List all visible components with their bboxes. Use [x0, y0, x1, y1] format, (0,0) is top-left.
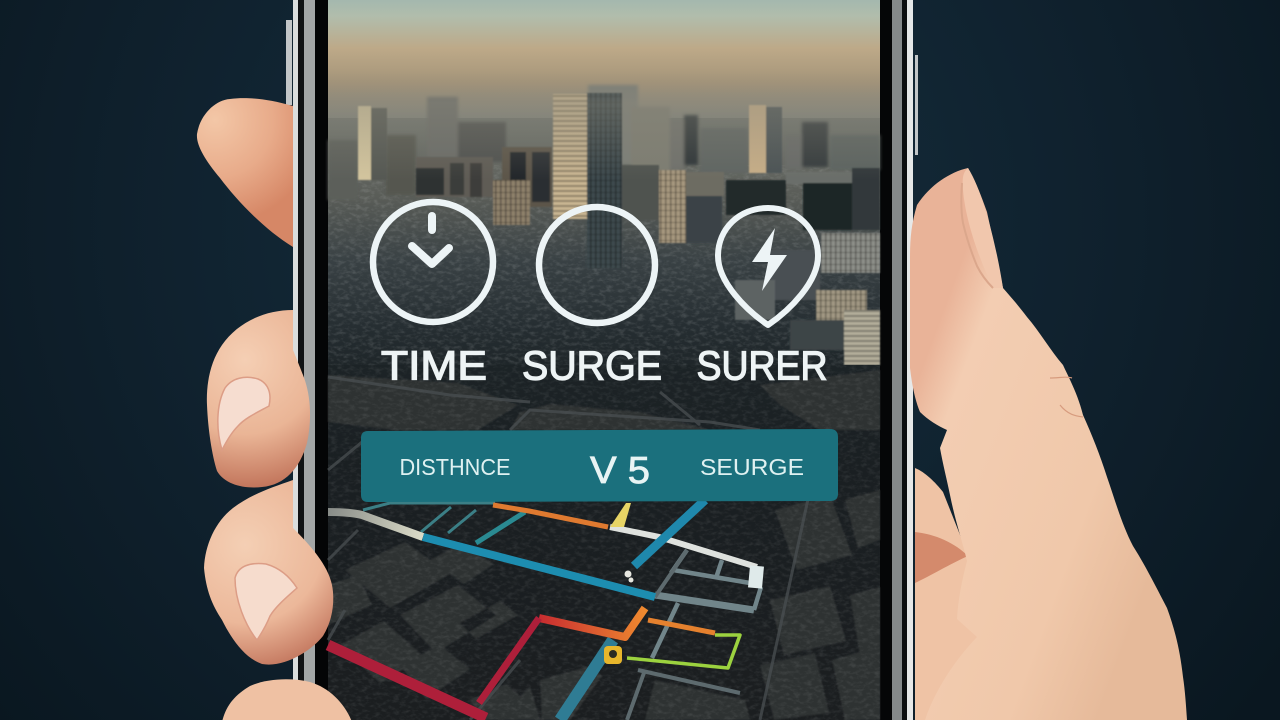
back finger and palm [915, 468, 1000, 720]
thumb [910, 168, 1187, 720]
icon: surge circle [539, 207, 655, 323]
finger: top [197, 98, 293, 247]
skyline haze [328, 70, 880, 180]
finger: second [207, 310, 310, 487]
finger: bottom [222, 679, 352, 720]
icon: lightning pin [718, 208, 818, 325]
knuckle creases [1050, 377, 1083, 417]
fingernail [235, 564, 297, 640]
city skyline [328, 70, 880, 378]
thumbnail crease [961, 183, 993, 288]
screen [328, 0, 880, 720]
white route [328, 512, 757, 588]
central tower [553, 93, 622, 268]
label: SURGE: SURGE [522, 342, 662, 388]
blue route [423, 500, 705, 720]
right tower [749, 105, 782, 173]
phone body right edge [880, 0, 913, 720]
label: TIME: TIME [381, 342, 487, 388]
label: SURER: SURER [696, 342, 828, 388]
fingernail [218, 377, 270, 450]
red route [328, 618, 539, 718]
city texture [328, 165, 880, 365]
sky [328, 0, 880, 135]
orange route [493, 505, 715, 637]
right thumb and hand [910, 168, 1187, 720]
side buttons [286, 20, 918, 224]
phone body left edge [293, 0, 328, 720]
comparison banner [361, 429, 838, 502]
left tower [358, 106, 387, 180]
thumbnail [963, 168, 1003, 288]
banner text: versus: V 5 [590, 450, 650, 492]
route markers [604, 503, 634, 664]
back finger crease [915, 532, 968, 583]
finger: third [204, 480, 333, 665]
left hand [197, 98, 352, 720]
banner text: surge: SEURGE [700, 454, 804, 480]
banner text: distance: DISTHNCE [400, 454, 510, 480]
grey grid lines [627, 550, 761, 720]
phone [286, 0, 918, 720]
route map [328, 500, 761, 720]
ground map [328, 365, 880, 720]
green route [627, 635, 740, 668]
teal grid lines [363, 503, 525, 543]
icon: clock [373, 202, 493, 322]
